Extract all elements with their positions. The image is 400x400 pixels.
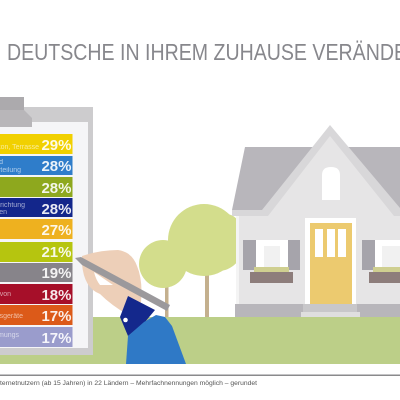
row: 29%: 29% <box>41 137 72 154</box>
row: 19%: 19% <box>41 265 72 282</box>
row: 28% navy: 28% <box>41 201 72 218</box>
row: 17% lavender: 17% <box>41 330 72 347</box>
clipboard clip <box>0 97 32 127</box>
roof <box>232 147 400 210</box>
row: 19% <box>0 263 72 282</box>
gable trim <box>232 125 400 216</box>
row: 18%: 18% <box>41 287 72 304</box>
clipboard board <box>0 107 93 355</box>
right window <box>362 240 400 283</box>
row: 28% olive <box>0 177 72 197</box>
left window <box>243 240 300 283</box>
lawn <box>0 317 400 364</box>
row: 18% <box>0 284 72 304</box>
row: 17% orange: 17% <box>41 308 72 325</box>
tree: large <box>168 204 243 317</box>
row: 18%: von <box>0 291 11 298</box>
row: 27%: 27% <box>41 222 72 239</box>
footnote: ternetnutzern (ab 15 Jahren) in 22 Ländern – Mehrfachnennungen möglich – gerundet <box>0 380 257 387</box>
row: 17% orange <box>0 305 72 325</box>
row: 27% <box>0 219 72 239</box>
row: 28% navy <box>0 198 72 218</box>
attic window <box>322 167 340 200</box>
row: 29% <box>0 134 72 154</box>
house <box>232 125 400 317</box>
tree: small <box>139 240 187 317</box>
cuff button <box>123 318 128 322</box>
hand with pen <box>75 250 186 364</box>
hand <box>82 250 142 316</box>
row: 21%: 21% <box>41 244 72 261</box>
sleeve cuff <box>120 296 155 336</box>
row: 28% olive: 28% <box>41 180 72 197</box>
house wall <box>236 132 400 304</box>
row: 21% <box>0 242 72 262</box>
footer rule <box>0 374 400 376</box>
wall edge <box>236 214 239 304</box>
pen <box>75 257 170 311</box>
jacket <box>126 315 186 364</box>
row: 28% blue <box>0 156 72 175</box>
row: 28% blue: 28% <box>41 158 72 175</box>
foundation <box>235 304 400 317</box>
clipboard <box>0 97 93 355</box>
door <box>305 218 356 305</box>
row: 17% lavender <box>0 327 72 347</box>
clipboard paper <box>0 122 88 348</box>
